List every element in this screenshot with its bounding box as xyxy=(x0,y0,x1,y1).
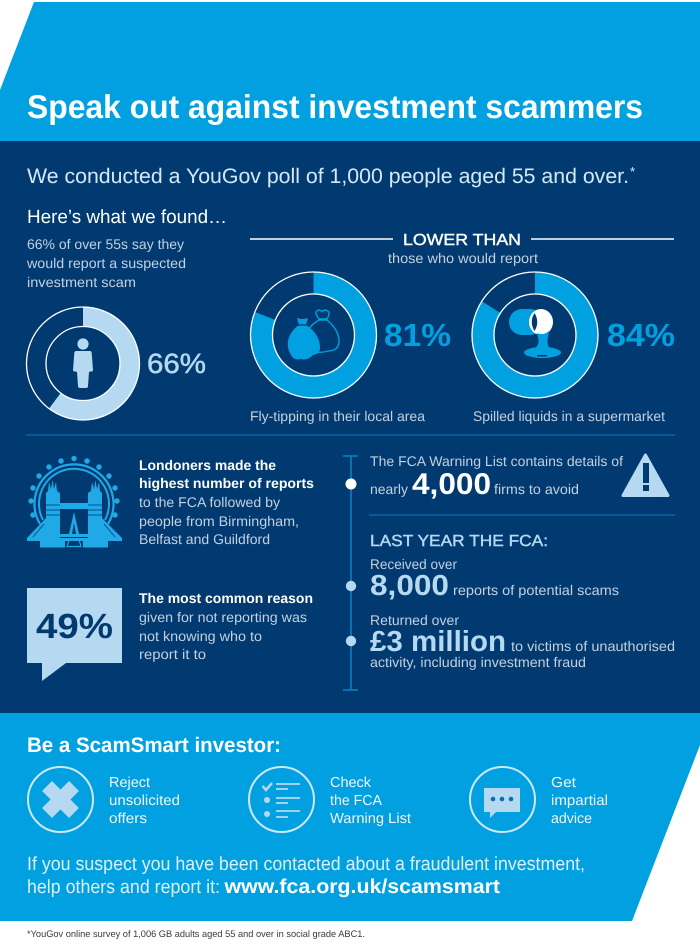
text block: Londoners reports: to the FCA followed by xyxy=(139,494,280,510)
icon: person xyxy=(73,338,93,388)
statistic: £3 million returned: activity, including investment fraud xyxy=(370,654,586,670)
statistic: £3 million returned: £3 million xyxy=(370,626,506,658)
caption: fly-tipping: Fly-tipping in their local area xyxy=(250,408,425,424)
text: get impartial advice: advice xyxy=(551,811,592,827)
text block: Londoners reports: highest number of reports xyxy=(139,475,314,491)
heading: lower than: those who would report xyxy=(388,250,538,266)
text block: Londoners reports: Belfast and Guildford xyxy=(139,531,270,547)
statistic: £3 million returned: to victims of unauthorised xyxy=(511,638,675,654)
title: Speak out against investment scammers xyxy=(27,88,643,125)
text block: most common reason: report it to xyxy=(139,646,206,662)
footnote: *YouGov online survey of 1,006 GB adults aged 55 and over in social grade ABC1. xyxy=(27,929,365,940)
callout: 49% speech bubble xyxy=(27,588,122,681)
statistic: 8,000 reports: reports of potential scams xyxy=(453,582,619,598)
statistic: 8,000 reports: Received over xyxy=(370,556,457,572)
donut chart: 84% spilled liquids xyxy=(472,272,598,398)
donut chart: 66% xyxy=(26,307,140,420)
text: reject unsolicited offers: Reject xyxy=(109,775,150,791)
heading: lower than: LOWER THAN xyxy=(403,232,521,249)
text block: FCA Warning List: The FCA Warning List contains details of xyxy=(370,453,623,469)
text: reject unsolicited offers: offers xyxy=(109,811,147,827)
text block: FCA Warning List xyxy=(370,453,623,501)
heading: lower than xyxy=(250,232,674,266)
statistic: 84%: 84% xyxy=(607,317,675,353)
text: get impartial advice: impartial xyxy=(551,793,608,809)
text: reject unsolicited offers xyxy=(109,775,180,827)
text: get impartial advice xyxy=(551,775,608,827)
icon: warning triangle xyxy=(623,455,668,496)
text block: 66% description: investment scam xyxy=(27,274,136,290)
statistic: 8,000 reports xyxy=(370,556,619,602)
text block: most common reason: not knowing who to xyxy=(139,628,262,644)
subheading: here's what we found: Here’s what we found… xyxy=(27,207,227,228)
text block: Londoners reports xyxy=(139,457,314,547)
icon: reject cross xyxy=(28,767,93,832)
text: check the FCA Warning List: Warning List xyxy=(330,811,411,827)
heading: be a ScamSmart investor: Be a ScamSmart investor: xyxy=(27,734,281,757)
text block: most common reason xyxy=(139,590,313,662)
text block: most common reason: The most common reason xyxy=(139,590,313,606)
intro heading: * xyxy=(630,164,635,179)
panel: header band xyxy=(0,2,700,142)
heading: last year the FCA: LAST YEAR THE FCA: xyxy=(370,533,548,550)
panel: survey findings background xyxy=(0,141,700,713)
text block: report call to action: If you suspect you have been contacted about a fraudulent investment, xyxy=(27,854,585,875)
text block: 66% description: 66% of over 55s say they xyxy=(27,236,184,252)
statistic: 8,000 reports: 8,000 xyxy=(370,570,449,602)
intro heading: We conducted a YouGov poll of 1,000 people aged 55 and over. xyxy=(27,165,629,188)
statistic: £3 million returned: Returned over xyxy=(370,612,459,628)
icon: London skyline with Tower Bridge and London Eye xyxy=(27,456,122,548)
text block: report call to action xyxy=(27,854,585,898)
statistic: £3 million returned xyxy=(370,612,675,670)
text block: FCA Warning List: nearly xyxy=(370,481,408,497)
text block: FCA Warning List: 4,000 xyxy=(412,468,491,501)
text block: Londoners reports: people from Birmingham, xyxy=(139,513,299,529)
icon: advice speech bubble xyxy=(470,767,535,832)
text block: 66% description xyxy=(26,236,186,290)
text block: Londoners reports: Londoners made the xyxy=(139,457,276,473)
statistic: 81%: 81% xyxy=(384,317,451,353)
text block: report call to action: help others and report it: xyxy=(27,877,220,898)
text block: most common reason: given for not reporting was xyxy=(139,609,307,625)
text: reject unsolicited offers: unsolicited xyxy=(109,793,180,809)
text: check the FCA Warning List: Check xyxy=(330,775,372,791)
text: check the FCA Warning List: the FCA xyxy=(330,793,382,809)
text block: 66% description: would report a suspected xyxy=(26,255,186,271)
text block: report call to action: www.fca.org.uk/scamsmart xyxy=(223,876,500,898)
text block: FCA Warning List: firms to avoid xyxy=(494,481,579,497)
icon: spilled liquid can xyxy=(509,309,561,358)
icon: money bags xyxy=(288,310,339,360)
caption: spilled liquids: Spilled liquids in a supermarket xyxy=(473,408,665,424)
donut chart: 81% fly-tipping xyxy=(250,272,377,398)
panel: ScamSmart call to action xyxy=(0,713,700,921)
callout: 49% speech bubble: 49% xyxy=(36,607,113,646)
text: get impartial advice: Get xyxy=(551,775,576,791)
text: check the FCA Warning List xyxy=(330,775,411,827)
icon: checklist xyxy=(249,767,314,832)
statistic: 66%: 66% xyxy=(147,348,206,379)
timeline xyxy=(343,456,358,690)
